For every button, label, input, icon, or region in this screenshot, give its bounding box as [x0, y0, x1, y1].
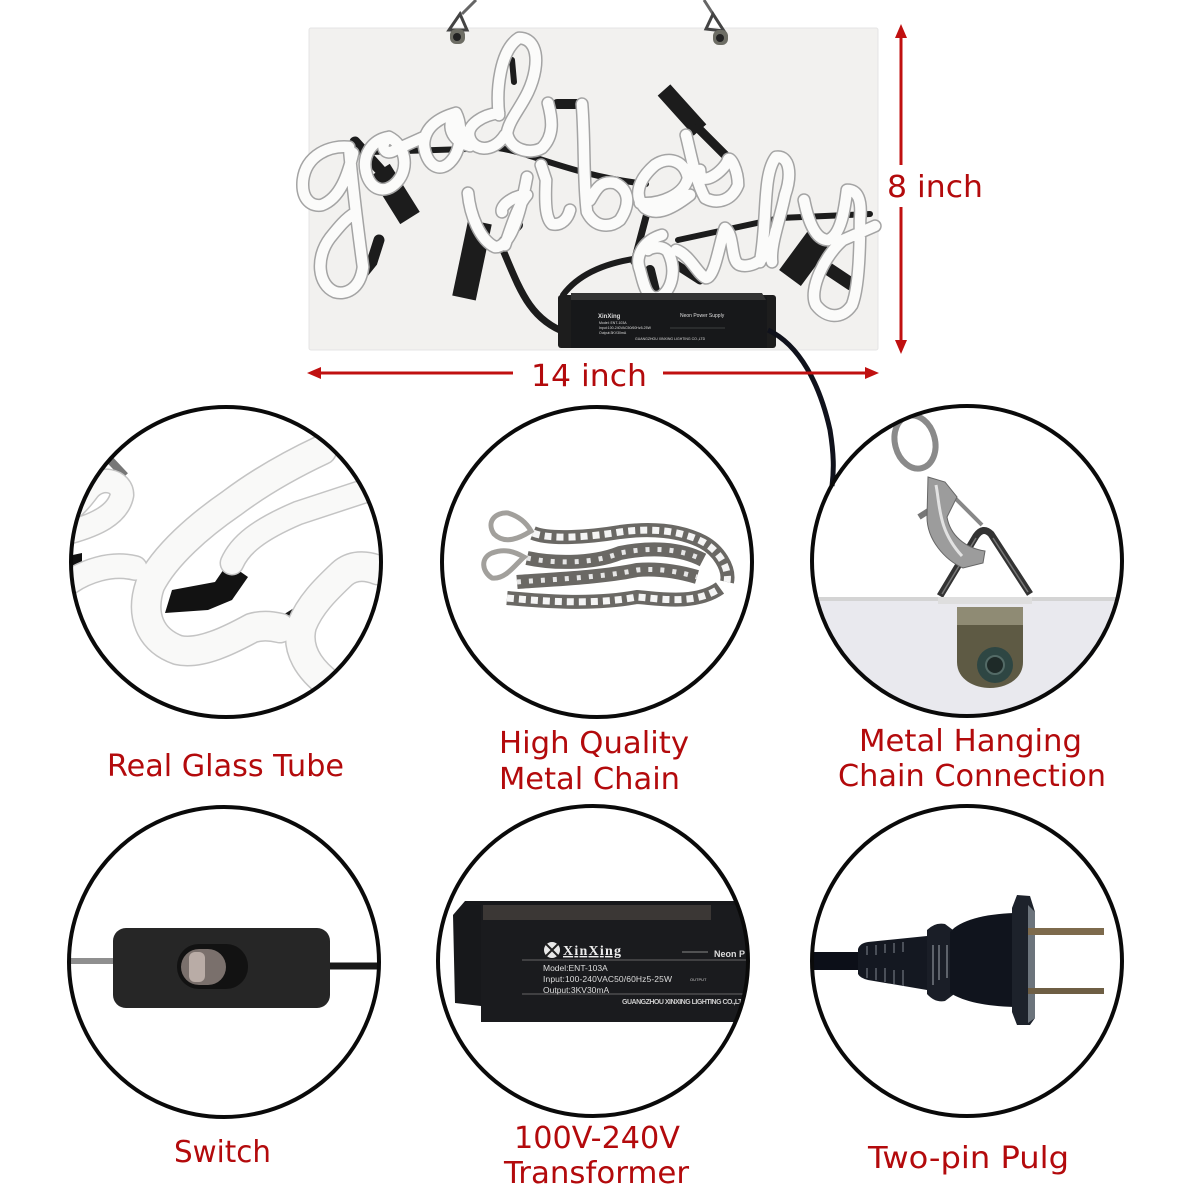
- acrylic backboard: [309, 28, 878, 350]
- transformer body: [453, 901, 736, 1006]
- panel: real glass tube close-up: [68, 407, 381, 717]
- neon tube "good vibes only" lettering: [303, 38, 875, 316]
- dimension arrow: height 8 inch: [887, 24, 983, 354]
- metal pins: [1028, 928, 1104, 935]
- plug body: [950, 913, 1014, 1007]
- dimension arrow: width 14 inch: [307, 359, 879, 394]
- panel: metal hanging chain connection close-up: [810, 406, 1130, 727]
- power supply box: [558, 293, 776, 348]
- face plate: [1012, 895, 1035, 1025]
- power supply box: XinXing: [598, 314, 621, 320]
- label: 100V-240V Transformer: [503, 1121, 690, 1191]
- label: Switch: Switch: [174, 1135, 271, 1170]
- transformer label: Neon P: [714, 949, 745, 959]
- panel: neon sign product photo: [303, 0, 878, 350]
- acrylic panel edge: [820, 601, 1114, 714]
- plug collar: [927, 924, 953, 1001]
- panel: transformer close-up: [438, 806, 750, 1116]
- neon tube outline: [303, 38, 875, 316]
- tube outlines: [70, 450, 378, 685]
- label: High Quality Metal Chain: [499, 726, 689, 797]
- label: High Quality Metal Chain: High Quality: [499, 726, 689, 761]
- chain link ring: [891, 415, 939, 472]
- white glass tubes: [70, 450, 378, 685]
- label: Metal Hanging Chain Connection: [838, 724, 1106, 794]
- switch housing: [113, 928, 330, 1008]
- power cord running to the plug area: [768, 330, 833, 486]
- panel: two-pin plug close-up: [806, 806, 1122, 1116]
- label: Metal Hanging Chain Connection: Metal Hanging: [859, 724, 1082, 759]
- power supply box: Input:100-240VAC50/60Hz5-25W: [599, 326, 652, 330]
- lobster clasps: [484, 513, 531, 578]
- power supply box: GUANGZHOU XINXING LIGHTING CO.,LTD: [635, 337, 706, 341]
- transformer label: GUANGZHOU XINXING LIGHTING CO.,LTD: [622, 999, 747, 1006]
- cord: [814, 952, 858, 970]
- dimension arrow: height 8 inch: 8 inch: [887, 170, 983, 205]
- strain relief: [858, 936, 927, 990]
- transformer label: Input:100-240VAC50/60Hz5-25W: [543, 974, 672, 984]
- power supply box: Output:3KV30mA: [599, 331, 627, 335]
- black paint-out section: [165, 571, 248, 613]
- transformer label: Output:3KV30mA: [543, 985, 609, 995]
- power supply box: Neon Power Supply: [680, 313, 725, 319]
- slider button: [177, 944, 248, 989]
- label: Metal Hanging Chain Connection: Chain Connection: [838, 759, 1106, 794]
- transformer label: [543, 942, 747, 1006]
- black tube ends and internal wiring: [355, 60, 870, 333]
- panel: metal chain close-up: [442, 407, 752, 717]
- label: High Quality Metal Chain: Metal Chain: [499, 762, 680, 797]
- lobster clasp: [919, 477, 985, 568]
- label: 100V-240V Transformer: 100V-240V: [514, 1121, 680, 1156]
- triangular hanger: [940, 530, 1030, 596]
- transformer label: OUTPUT: [690, 977, 707, 982]
- metal bracket with nut: [957, 625, 1023, 688]
- label: Two-pin Pulg: Two-pin Pulg: [867, 1141, 1069, 1176]
- label: Real Glass Tube: Real Glass Tube: [107, 749, 344, 784]
- cord: [71, 958, 113, 964]
- hanging chain hooks: [449, 0, 728, 45]
- power supply box: Model: ENT-103A: [599, 321, 627, 325]
- transformer label: Model:ENT-103A: [543, 963, 608, 973]
- transformer label: XinXing: [563, 944, 621, 959]
- panel: switch close-up: [66, 807, 385, 1117]
- dimension arrow: width 14 inch: 14 inch: [531, 359, 647, 394]
- label: 100V-240V Transformer: Transformer: [503, 1156, 690, 1191]
- chain strands: [507, 530, 727, 602]
